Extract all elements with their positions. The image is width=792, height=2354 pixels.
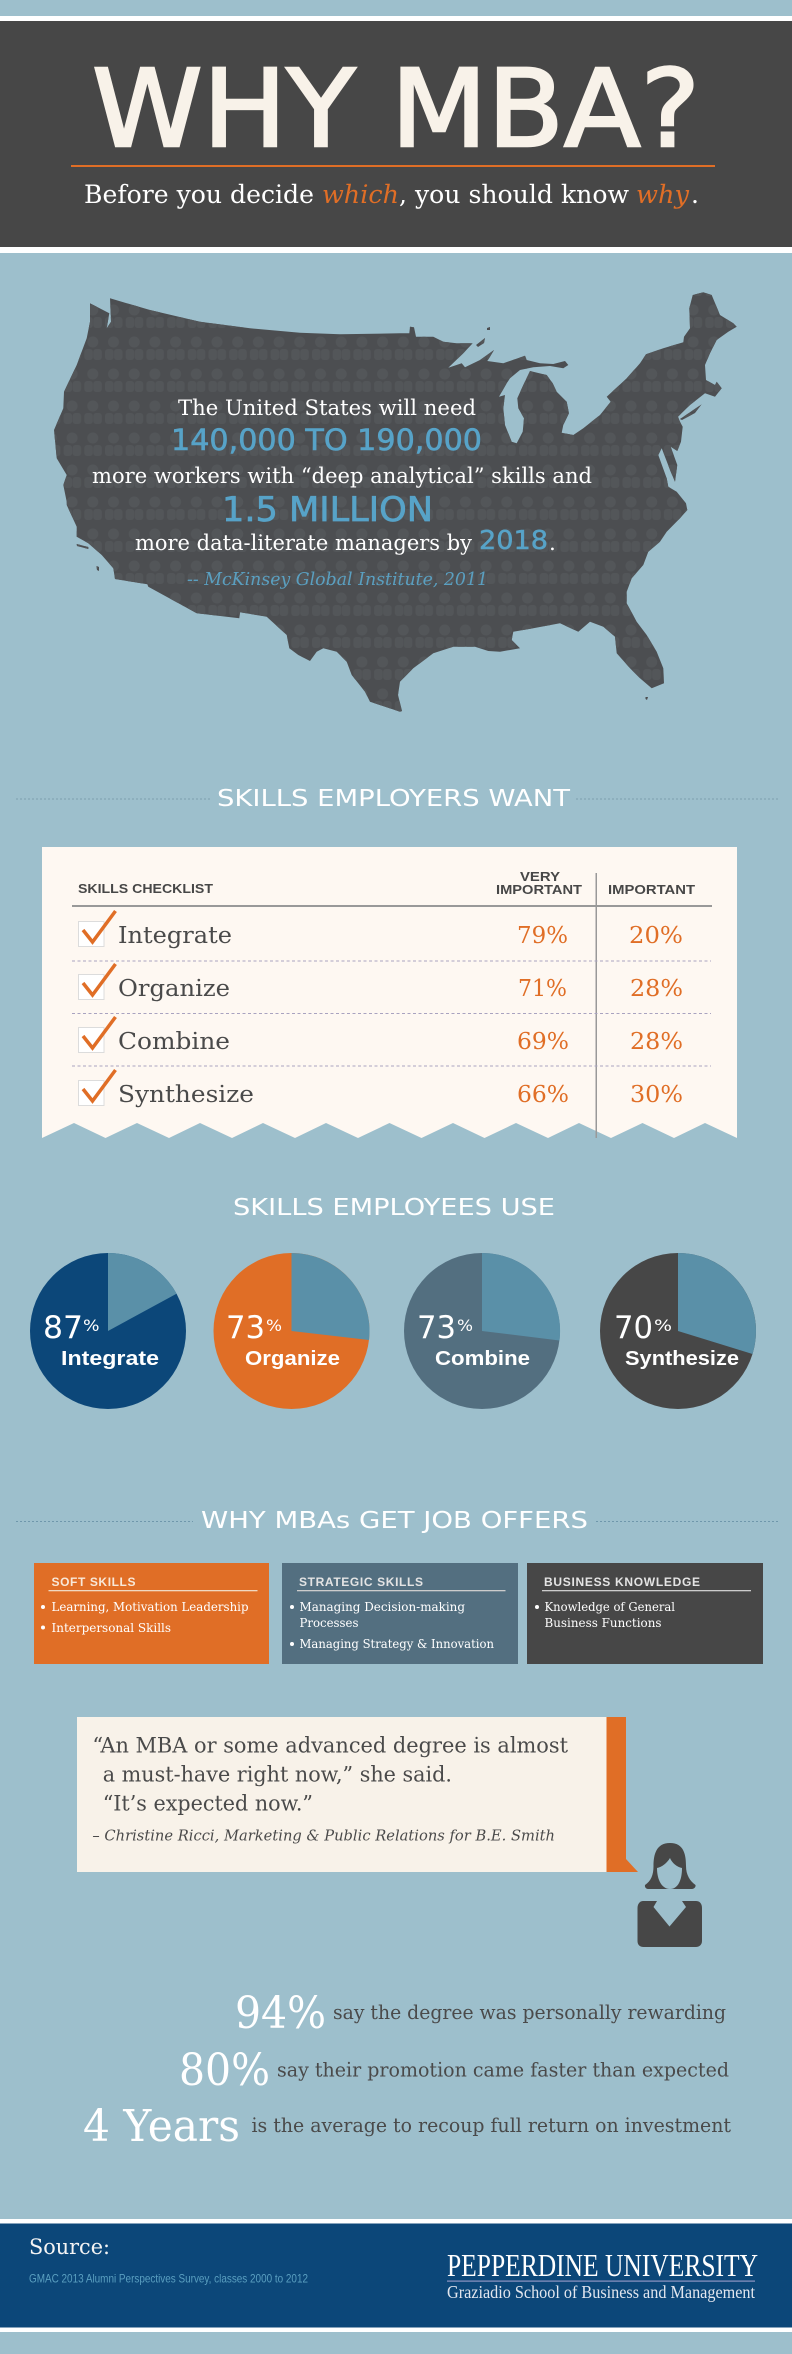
stat: 4 Years <box>83 2101 731 2152</box>
map text: . <box>549 531 556 556</box>
panel: strategic skills: Managing Decision-making <box>300 1600 465 1614</box>
row: Combine: 69% <box>517 1029 569 1055</box>
row: Organize: 28% <box>630 976 683 1002</box>
panel: soft skills <box>34 1563 269 1664</box>
row: Integrate: 20% <box>629 923 683 949</box>
map of the United States with workforce statistics <box>50 290 740 715</box>
panel: strategic skills: Processes <box>300 1616 358 1630</box>
panel: business knowledge: Knowledge of General <box>544 1600 675 1614</box>
row: Organize <box>78 964 683 1002</box>
panel: skills checklist table <box>42 847 737 1138</box>
callout: quote <box>77 1717 638 1872</box>
row: Combine: Combine <box>118 1027 230 1055</box>
pie chart: Organize 73%: 73 <box>226 1310 265 1346</box>
table header <box>78 869 695 897</box>
callout: quote: a must-have right now,” she said. <box>103 1763 452 1787</box>
pie chart: Synthesize 70%: % <box>654 1316 672 1335</box>
pie chart: Combine 73%: 73 <box>417 1310 456 1346</box>
row: Organize: 71% <box>518 976 567 1002</box>
map text: The United States will need <box>178 396 476 421</box>
stat: 80% <box>179 2045 729 2096</box>
row: Integrate: Integrate <box>118 921 232 949</box>
stat: 94%: say the degree was personally rewarding <box>333 2001 726 2024</box>
pie chart: Combine 73%: % <box>457 1316 473 1335</box>
logo: Pepperdine University: Graziadio School of Business and Management <box>447 2282 755 2302</box>
panel: soft skills: SOFT SKILLS <box>52 1575 136 1589</box>
pie chart: Organize 73% <box>214 1253 370 1409</box>
header banner <box>0 16 792 253</box>
map text: 140,000 TO 190,000 <box>171 423 482 457</box>
subtitle: why <box>636 180 690 209</box>
heading: skills employers want: SKILLS EMPLOYERS WANT <box>217 786 571 812</box>
pie chart: Integrate 87%: % <box>83 1316 100 1335</box>
row: Integrate <box>78 911 683 949</box>
pie chart: Organize 73%: Organize <box>245 1348 340 1370</box>
pie chart: Synthesize 70%: 70 <box>614 1310 653 1346</box>
table header: VERY <box>520 869 560 884</box>
pie chart: Synthesize 70%: Synthesize <box>625 1348 739 1370</box>
row: Synthesize: 30% <box>630 1082 683 1108</box>
row: Combine: 28% <box>630 1029 683 1055</box>
footer: GMAC 2013 Alumni Perspectives Survey, classes 2000 to 2012 <box>29 2272 308 2286</box>
callout: quote: “It’s expected now.” <box>103 1792 313 1816</box>
pie chart: Combine 73%: Combine <box>435 1348 530 1370</box>
heading: skills employees use: SKILLS EMPLOYEES USE <box>233 1195 555 1221</box>
pie chart: Organize 73%: % <box>266 1316 282 1335</box>
row: Synthesize: Synthesize <box>118 1080 254 1108</box>
subtitle: Before you decide <box>84 180 314 209</box>
footer <box>0 2219 792 2332</box>
subtitle <box>84 180 699 209</box>
panel: strategic skills: Managing Strategy & Innovation <box>300 1637 494 1651</box>
statistics <box>83 1988 731 2152</box>
title: WHY MBA? <box>92 48 700 172</box>
map text <box>92 396 592 590</box>
row: Combine <box>78 1017 683 1055</box>
pie chart: Integrate 87%: 87 <box>43 1310 83 1346</box>
map text: 2018 <box>479 526 548 556</box>
stat: 94% <box>235 1988 726 2039</box>
subtitle: . <box>691 180 699 209</box>
pie chart: Synthesize 70% <box>600 1253 756 1409</box>
pie chart: Integrate 87% <box>30 1253 186 1409</box>
table header: IMPORTANT <box>608 882 695 897</box>
panel: soft skills: Interpersonal Skills <box>52 1621 171 1635</box>
row: Synthesize <box>78 1070 683 1108</box>
stat: 80%: 80% <box>179 2045 270 2096</box>
row: Synthesize: 66% <box>517 1082 569 1108</box>
pie chart: Integrate 87%: Integrate <box>61 1348 159 1370</box>
map shape <box>50 290 740 715</box>
logo: Pepperdine University <box>447 2247 758 2302</box>
panel: soft skills: Learning, Motivation Leadership <box>52 1600 249 1614</box>
panel: business knowledge <box>527 1563 763 1664</box>
stat: 94%: 94% <box>235 1988 326 2039</box>
callout: quote: – Christine Ricci, Marketing & Public Relations for B.E. Smith <box>92 1827 555 1845</box>
pie chart: Combine 73% <box>404 1253 560 1409</box>
table header: IMPORTANT <box>496 882 582 897</box>
map text: more data-literate managers by <box>135 531 473 556</box>
panel: strategic skills: STRATEGIC SKILLS <box>299 1575 423 1589</box>
callout: quote: “An MBA or some advanced degree is almost <box>92 1734 569 1758</box>
icon: businesswoman <box>638 1843 702 1947</box>
source: Source: <box>29 2235 110 2260</box>
row: Organize: Organize <box>118 974 230 1002</box>
stat: 4 Years: 4 Years <box>83 2101 240 2152</box>
stat: 4 Years: is the average to recoup full return on investment <box>252 2114 731 2137</box>
map text: 1.5 MILLION <box>222 490 433 530</box>
subtitle: which <box>322 180 399 209</box>
subtitle: , you should know <box>399 180 630 209</box>
map text: more workers with “deep analytical” skills and <box>92 464 592 489</box>
panel: strategic skills <box>282 1563 518 1664</box>
panel: business knowledge: Business Functions <box>544 1616 662 1630</box>
table header: SKILLS CHECKLIST <box>78 881 213 896</box>
panel: business knowledge: BUSINESS KNOWLEDGE <box>544 1575 700 1589</box>
map text: -- McKinsey Global Institute, 2011 <box>187 569 488 590</box>
heading: why MBAs get job offers: WHY MBAs GET JOB OFFERS <box>201 1508 588 1534</box>
row: Integrate: 79% <box>517 923 568 949</box>
stat: 80%: say their promotion came faster than expected <box>277 2059 729 2082</box>
